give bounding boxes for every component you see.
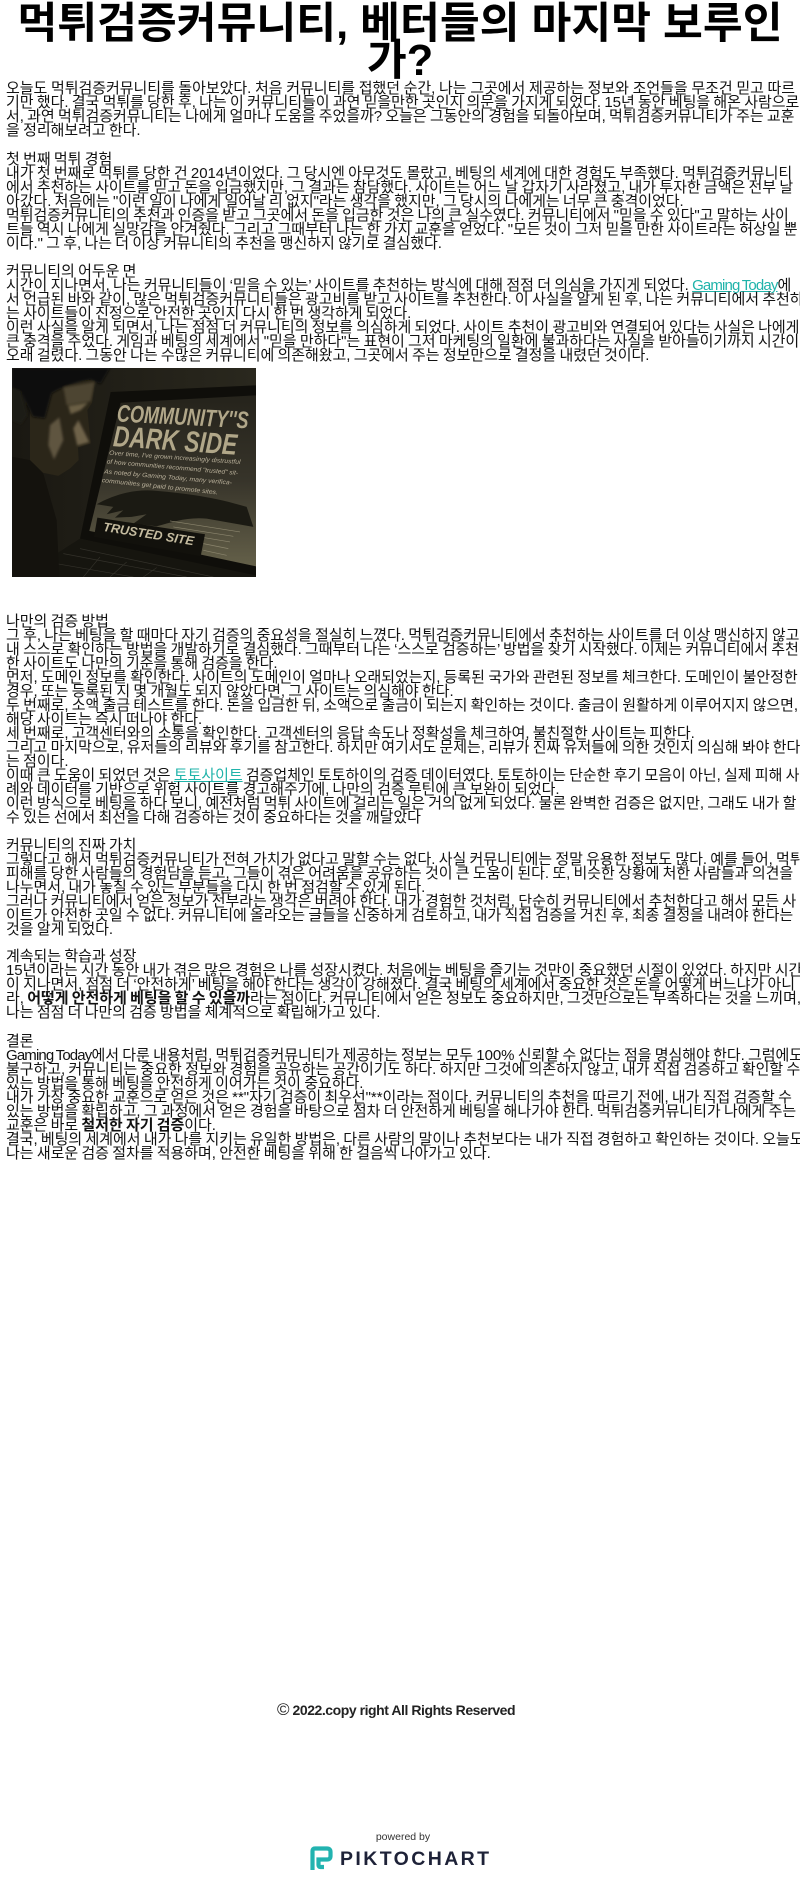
screen small text: communities get paid to promote sites. — [101, 477, 218, 496]
section: dark side of the community: 이런 사실을 알게 되면서, 나는 점점 더 커뮤니티의 정보를 의심하게 되었다. 사이트 추천이 광고비와 연결되어 있다는 사실은 나에게 — [6, 319, 799, 336]
section: conclusion: 교훈은 바로 철저한 자기 검증이다. — [6, 1117, 216, 1134]
illustration: community's dark side — [12, 368, 256, 577]
section: my verification method: 두 번째로, 소액 출금 테스트를 한다. 돈을 입금한 뒤, 소액으로 출금이 되는지 확인하는 것이다. 출금이 원활하게 이루어지지 않으면, — [6, 697, 798, 714]
section: first scam experience: 먹튀검증커뮤니티의 추천과 인증을 받고 그곳에서 돈을 입금한 것은 나의 큰 실수였다. 커뮤니티에서 "믿을 수 있다"고 말하는 사이 — [6, 207, 789, 224]
section: dark side of the community: 큰 충격을 주었다. 게임과 베팅의 세계에서 "믿을 만하다"는 표현이 그저 마케팅의 일환에 불과하다는 사실을 받아들이기까지 시간이 — [6, 333, 799, 350]
section: conclusion — [6, 1033, 800, 1162]
man — [12, 368, 110, 577]
section: conclusion: 내가 가장 중요한 교훈으로 얻은 것은 **"자기 검증이 최우선"**이라는 점이다. 커뮤니티의 추천을 따르기 전에, 내가 직접 검증할 수 — [6, 1089, 792, 1106]
intro text — [6, 80, 799, 139]
section: first scam experience: 내가 첫 번째로 먹튀를 당한 건 2014년이었다. 그 당시엔 아무것도 몰랐고, 베팅의 세계에 대한 경험도 부족했다. 먹튀검증커뮤니티 — [6, 165, 792, 182]
section: my verification method: 먼저, 도메인 정보를 확인한다. 사이트의 도메인이 얼마나 오래되었는지, 등록된 국가와 관련된 정보를 체크한다. 도메인이 불안정한 — [6, 669, 798, 686]
section: my verification method: 그리고 마지막으로, 유저들의 리뷰와 후기를 참고한다. 하지만 여기서도 문제는, 리뷰가 진짜 유저들에 의한 것인지 의심해 봐야 한다 — [6, 739, 800, 756]
screen small text: of how communities recommend "trusted" sit- — [106, 459, 238, 477]
shadow hand — [97, 490, 253, 527]
section: continued learning and growth: 15년이라는 시간 동안 내가 겪은 많은 경험은 나를 성장시켰다. 처음에는 베팅을 즐기는 것만이 중요했던 시절이 있었다. 하지만 시간 — [6, 962, 800, 979]
section: true value of the community: 그러나 커뮤니티에서 얻은 정보가 전부라는 생각은 버려야 한다. 내가 경험한 것처럼, 단순히 커뮤니티에서 추천한다고 해서 모든 사 — [6, 893, 796, 910]
section: conclusion: 나는 새로운 검증 절차를 적용하며, 안전한 베팅을 위해 한 걸음씩 나아가고 있다. — [6, 1145, 491, 1162]
screen headline — [112, 400, 249, 462]
section: my verification method: 한 사이트도 나만의 기준을 통해 검증을 한다. — [6, 655, 278, 672]
title — [17, 0, 783, 85]
section: my verification method — [6, 613, 800, 826]
piktochart wordmark: PIKTOCHART — [340, 1848, 491, 1870]
screen small text: As noted by Gaming Today, many verifica- — [103, 468, 232, 487]
section: my verification method: 례와 데이터를 기반으로 위험 사이트를 경고해주기에, 나만의 검증 루틴에 큰 보완이 되었다. — [6, 781, 559, 798]
section: dark side of the community: 서 언급된 바와 같이, 많은 먹튀검증커뮤니티들은 광고비를 받고 사이트를 추천한다. 이 사실을 알게 된 후, 나는 커뮤니티에서 추천하 — [6, 291, 800, 308]
title: 가? — [367, 37, 433, 85]
section: my verification method: 는 점이다. — [6, 753, 68, 770]
section: my verification method: 그 후, 나는 베팅을 할 때마다 자기 검증의 중요성을 절실히 느꼈다. 먹튀검증커뮤니티에서 추천하는 사이트를 더 이상 맹신하지 않고, — [6, 627, 800, 644]
section: true value of the community: 것을 알게 되었다. — [6, 921, 113, 938]
section: my verification method: 이때 큰 도움이 되었던 것은 토토사이트 검증업체인 토토하이의 검증 데이터였다. 토토하이는 단순한 후기 모음이 아닌, 실제 피해 사 — [6, 767, 799, 784]
intro text: 을 정리해보려고 한다. — [6, 122, 141, 139]
section: dark side of the community: 오래 걸렸다. 그동안 나는 수많은 커뮤니티에 의존해왔고, 그곳에서 주는 정보만으로 결정을 내렸던 것이다. — [6, 347, 649, 364]
wall — [12, 368, 256, 577]
laptop — [57, 385, 256, 577]
section: conclusion: 불구하고, 커뮤니티는 중요한 정보와 경험을 공유하는 공간이기도 하다. 하지만 그것에 의존하지 않고, 내가 직접 검증하고 확인할 수 — [6, 1061, 800, 1078]
section: dark side of the community — [6, 263, 800, 364]
section: my verification method: 경우, 또는 등록된 지 몇 개월도 되지 않았다면, 그 사이트는 의심해야 한다. — [6, 683, 454, 700]
section: continued learning and growth: 이 지나면서, 점점 더 ‘안전하게’ 베팅을 해야 한다는 생각이 강해졌다. 결국 베팅의 세계에서 중요한 것은 돈을 어떻게 버느냐가 아니 — [6, 976, 795, 993]
section: my verification method: 세 번째로, 고객센터와의 소통을 확인한다. 고객센터의 응답 속도나 정확성을 체크하여, 불친절한 사이트는 피한다. — [6, 725, 695, 742]
title: 먹튀검증커뮤니티, 베터들의 마지막 보루인 — [17, 0, 783, 48]
section: conclusion: 있는 방법을 통해 베팅을 안전하게 이어가는 것이 중요하다. — [6, 1075, 363, 1092]
section: true value of the community: 이트가 안전한 곳일 수 없다. 커뮤니티에 올라오는 글들을 신중하게 검토하고, 내가 직접 검증을 거친 후, 최종 결정을 내려야 한다는 — [6, 907, 793, 924]
section: continued learning and growth — [6, 948, 800, 1021]
section: true value of the community: 커뮤니티의 진짜 가치 — [6, 837, 136, 854]
intro text: 서, 과연 먹튀검증커뮤니티는 나에게 얼마나 도움을 주었을까? 오늘은 그동안의 경험을 되돌아보며, 먹튀검증커뮤니티가 주는 교훈 — [6, 108, 794, 125]
section: true value of the community — [6, 837, 800, 938]
copyright: © 2022.copy right All Rights Reserved — [277, 1700, 515, 1719]
section: first scam experience: 첫 번째 먹튀 경험 — [6, 151, 112, 168]
section: dark side of the community: 시간이 지나면서, 나는 커뮤니티들이 ‘믿을 수 있는’ 사이트를 추천하는 방식에 대해 점점 더 의심을 가지게 되었다. Gaming Today에 — [6, 277, 791, 294]
section: first scam experience: 트들 역시 나에게 실망감을 안겨줬다. 그리고 그때부터 나는 한 가지 교훈을 얻었다. "모든 것이 그저 믿을 만한 사이트라는 허상일 뿐 — [6, 221, 798, 238]
section: my verification method: 수 있는 선에서 최선을 다해 검증하는 것이 중요하다는 것을 깨달았다 — [6, 809, 421, 826]
icon: piktochart logo — [310, 1846, 333, 1870]
section: true value of the community: 피해를 당한 사람들의 경험담을 듣고, 그들이 겪은 어려움을 공유하는 것이 큰 도움이 된다. 또, 비슷한 상황에 처한 사람들과 의견을 — [6, 865, 793, 882]
section: continued learning and growth: 나는 점점 더 나만의 검증 방법을 체계적으로 확립해가고 있다. — [6, 1004, 380, 1021]
section: first scam experience: 이다." 그 후, 나는 더 이상 커뮤니티의 추천을 맹신하지 않기로 결심했다. — [6, 235, 442, 252]
section: true value of the community: 그렇다고 해서 먹튀검증커뮤니티가 전혀 가치가 없다고 말할 수는 없다. 사실 커뮤니티에는 정말 유용한 정보도 많다. 예를 들어, 먹튀 — [6, 851, 800, 868]
section: true value of the community: 나누면서, 내가 놓칠 수 있는 부분들을 다시 한 번 점검할 수 있게 된다. — [6, 879, 425, 896]
section: conclusion: 결국, 베팅의 세계에서 내가 나를 지키는 유일한 방법은, 다른 사람의 말이나 추천보다는 내가 직접 경험하고 확인하는 것이다. 오늘도 — [6, 1131, 800, 1148]
section: first scam experience — [6, 151, 798, 252]
section: dark side of the community: 는 사이트들이 진정으로 안전한 곳인지 다시 한 번 생각하게 되었다. — [6, 305, 411, 322]
trusted site badge: TRUSTED SITE — [102, 520, 195, 548]
screen lines — [170, 521, 240, 555]
screen small text: Over time, I've grown increasingly distrustful — [109, 450, 241, 466]
intro text: 오늘도 먹튀검증커뮤니티를 돌아보았다. 처음 커뮤니티를 접했던 순간, 나는 그곳에서 제공하는 정보와 조언들을 무조건 믿고 따르 — [6, 80, 795, 97]
powered by: powered by — [376, 1831, 430, 1843]
section: my verification method: 나만의 검증 방법 — [6, 613, 109, 630]
section: continued learning and growth: 라, 어떻게 안전하게 베팅을 할 수 있을까라는 점이다. 커뮤니티에서 얻은 정보도 중요하지만, 그것만으로는 부족하다는 것을 느끼며, — [6, 990, 800, 1007]
section: continued learning and growth: 계속되는 학습과 성장 — [6, 948, 136, 965]
section: conclusion: Gaming Today에서 다룬 내용처럼, 먹튀검증커뮤니티가 제공하는 정보는 모두 100% 신뢰할 수 없다는 점을 명심해야 한다. 그럼에도 — [6, 1047, 800, 1064]
section: my verification method: 내 스스로 확인하는 방법을 개발하기로 결심했다. 그때부터 나는 ‘스스로 검증하는’ 방법을 찾기 시작했다. 이제는 커뮤니티에서 추천 — [6, 641, 799, 658]
section: conclusion: 결론 — [6, 1033, 34, 1050]
section: my verification method: 해당 사이트는 즉시 떠나야 한다. — [6, 711, 202, 728]
intro text: 기만 했다. 결국 먹튀를 당한 후, 나는 이 커뮤니티들이 과연 믿을만한 곳인지 의문을 가지게 되었다. 15년 동안 베팅을 해온 사람으로 — [6, 94, 799, 111]
section: first scam experience: 아갔다. 처음에는 "이런 일이 나에게 일어날 리 없지"라는 생각을 했지만, 그 당시의 나에게는 너무 큰 충격이었다. — [6, 193, 684, 210]
trusted site badge — [94, 518, 205, 556]
section: conclusion: 있는 방법을 확립하고, 그 과정에서 얻은 경험을 바탕으로 점차 더 안전하게 베팅을 해나가야 한다. 먹튀검증커뮤니티가 나에게 주는 — [6, 1103, 796, 1120]
section: my verification method: 이런 방식으로 베팅을 하다 보니, 예전처럼 먹튀 사이트에 걸리는 일은 거의 없게 되었다. 물론 완벽한 검증은 없지만, 그래도 내가 할 — [6, 795, 796, 812]
screen small text — [101, 450, 241, 496]
section: first scam experience: 에서 추천하는 사이트를 믿고 돈을 입금했지만, 그 결과는 참담했다. 사이트는 어느 날 갑자기 사라졌고, 내가 투자한 금액은 전부 날 — [6, 179, 793, 196]
section: dark side of the community: 커뮤니티의 어두운 면 — [6, 263, 136, 280]
